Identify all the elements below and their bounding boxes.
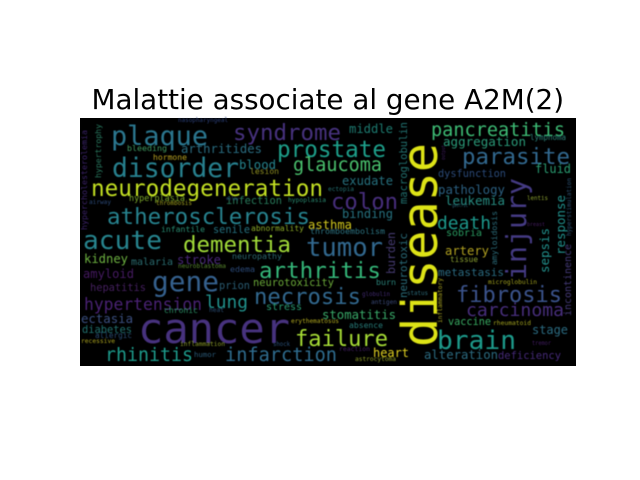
smaller words: tremor bbox=[532, 340, 551, 347]
smaller words: alteration bbox=[424, 348, 498, 362]
smaller words: thromboembolism bbox=[310, 226, 385, 236]
smaller words: ectopia bbox=[328, 186, 354, 193]
smaller words: leukemia bbox=[445, 193, 505, 208]
smaller words: hypertrophy bbox=[93, 124, 103, 178]
smaller words: hypoplasia bbox=[288, 197, 326, 204]
smaller words: stress bbox=[266, 302, 302, 313]
smaller words: erythematosus bbox=[291, 318, 339, 325]
smaller words: neuroblastoma bbox=[178, 263, 226, 270]
smaller words: neurotoxic bbox=[397, 233, 410, 298]
word: disorder: disorder bbox=[112, 153, 239, 184]
smaller words: amyloid bbox=[83, 267, 134, 281]
word: parasite: parasite bbox=[462, 144, 570, 170]
smaller words: output bbox=[441, 145, 447, 160]
smaller words: heat bbox=[209, 307, 224, 314]
word: death: death bbox=[437, 213, 491, 234]
smaller words: thrombosis bbox=[156, 200, 192, 207]
smaller words: inflammatory bbox=[437, 278, 444, 323]
word: hypertension: hypertension bbox=[84, 295, 202, 314]
smaller words: binding bbox=[342, 207, 393, 221]
word: colon: colon bbox=[331, 189, 398, 215]
word: fibrosis: fibrosis bbox=[456, 283, 562, 308]
smaller words: stage bbox=[532, 323, 568, 337]
smaller words: gastric bbox=[452, 203, 468, 209]
word: atherosclerosis: atherosclerosis bbox=[107, 204, 310, 230]
smaller words: fluid bbox=[535, 162, 571, 176]
smaller words: edema bbox=[230, 265, 255, 274]
smaller words: neurotoxicity bbox=[253, 277, 334, 289]
smaller words: aggregation bbox=[443, 134, 526, 149]
smaller words: antigen bbox=[371, 299, 397, 306]
smaller words: infantile bbox=[161, 224, 205, 234]
word: arthritis: arthritis bbox=[259, 258, 381, 284]
smaller words: prion bbox=[219, 280, 250, 292]
smaller words: exudate bbox=[342, 174, 393, 188]
word: disease: disease bbox=[393, 143, 449, 347]
word: acute: acute bbox=[83, 226, 162, 256]
smaller words: shock bbox=[273, 341, 290, 348]
smaller words: macroglobulin bbox=[398, 122, 410, 204]
word: injury: injury bbox=[500, 178, 533, 280]
smaller words: status bbox=[407, 291, 428, 297]
smaller words: allergic bbox=[95, 331, 132, 340]
smaller words: metastasis bbox=[438, 266, 504, 279]
word: carcinoma: carcinoma bbox=[466, 300, 564, 321]
word: syndrome: syndrome bbox=[233, 120, 341, 146]
smaller words: microglobulin bbox=[488, 279, 537, 286]
smaller words: hyperplasia bbox=[129, 194, 185, 204]
smaller words bbox=[79, 117, 574, 363]
smaller words: lesion bbox=[250, 167, 279, 176]
smaller words: incontinence bbox=[563, 244, 574, 316]
smaller words: lentis bbox=[527, 196, 548, 202]
smaller words: hyperstimulation bbox=[566, 178, 573, 236]
smaller words: infection bbox=[226, 195, 282, 207]
word: neurodegeneration: neurodegeneration bbox=[91, 176, 323, 202]
smaller words: chronic bbox=[164, 305, 198, 315]
panel: word cloud bbox=[79, 117, 576, 366]
smaller words: sobria bbox=[446, 228, 482, 239]
smaller words: neuropathy bbox=[232, 251, 282, 261]
smaller words: burn bbox=[376, 277, 396, 287]
word: rhinitis: rhinitis bbox=[105, 345, 193, 366]
smaller words: tissue bbox=[450, 255, 478, 264]
smaller words: pathology bbox=[438, 182, 505, 197]
smaller words: bleeding bbox=[127, 143, 167, 153]
smaller words: amyloidosis bbox=[489, 211, 499, 265]
smaller words: dysfunction bbox=[438, 168, 506, 180]
smaller words: ectasia bbox=[81, 311, 133, 326]
smaller words: astrocytoma bbox=[355, 356, 396, 363]
smaller words: abnormality bbox=[251, 224, 304, 233]
smaller words: blood bbox=[239, 158, 276, 172]
word: infarction: infarction bbox=[225, 345, 337, 366]
smaller words: diabetes bbox=[82, 324, 132, 336]
smaller words: inflammation bbox=[180, 341, 225, 348]
word: dementia: dementia bbox=[183, 232, 291, 258]
smaller words: vaccine bbox=[448, 317, 491, 328]
word: glaucoma: glaucoma bbox=[293, 155, 382, 176]
smaller words: burden bbox=[384, 232, 398, 274]
smaller words: sepsis bbox=[537, 228, 552, 273]
title: Malattie associate al gene A2M(2) bbox=[92, 83, 564, 116]
smaller words: airway bbox=[89, 199, 111, 206]
smaller words: rheumatoid bbox=[493, 320, 531, 327]
smaller words: lymphoma bbox=[530, 133, 566, 142]
smaller words: stroke bbox=[177, 253, 221, 267]
smaller words: kidney bbox=[84, 252, 128, 266]
smaller words: globulin bbox=[362, 292, 390, 298]
smaller words: middle bbox=[349, 122, 393, 136]
word: prostate: prostate bbox=[277, 137, 386, 163]
word: necrosis: necrosis bbox=[254, 284, 361, 310]
smaller words: heart bbox=[373, 346, 409, 360]
smaller words: hepatitis bbox=[90, 282, 146, 294]
smaller words: malaria bbox=[131, 257, 173, 268]
smaller words: recessive bbox=[81, 338, 115, 345]
smaller words: breast bbox=[527, 222, 545, 228]
smaller words: response bbox=[553, 195, 568, 255]
smaller words: hormone bbox=[153, 152, 187, 162]
smaller words: stomatitis bbox=[322, 308, 396, 322]
smaller words: hypercholesterolemia bbox=[79, 130, 89, 230]
word: gene: gene bbox=[152, 265, 219, 298]
word: tumor: tumor bbox=[306, 233, 383, 263]
smaller words: delay bbox=[226, 196, 239, 202]
smaller words: asthma bbox=[308, 218, 352, 232]
smaller words: artery bbox=[445, 244, 489, 258]
smaller words: absence bbox=[349, 320, 383, 330]
smaller words: arthritides bbox=[181, 142, 262, 156]
word: brain: brain bbox=[437, 326, 516, 356]
smaller words: nasopharyngeal bbox=[178, 117, 228, 124]
smaller words: deficiency bbox=[498, 350, 561, 362]
smaller words: senile bbox=[213, 224, 250, 236]
smaller words: reaction bbox=[339, 345, 370, 353]
word: cancer: cancer bbox=[138, 304, 290, 353]
word: plaque: plaque bbox=[111, 121, 208, 152]
word: lung: lung bbox=[205, 292, 248, 313]
smaller words: humor bbox=[194, 350, 217, 359]
word: pancreatitis: pancreatitis bbox=[431, 120, 565, 141]
word: failure: failure bbox=[295, 327, 388, 352]
